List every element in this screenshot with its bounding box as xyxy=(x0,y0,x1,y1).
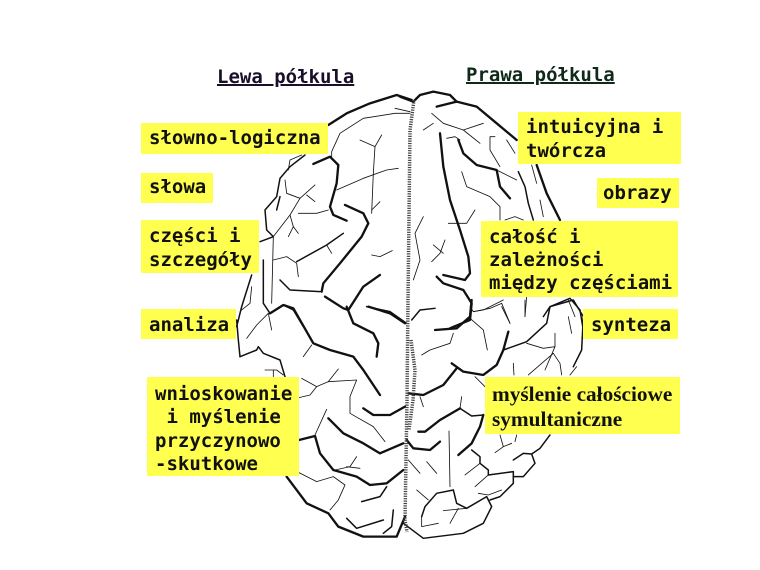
label: synteza xyxy=(583,309,678,339)
label: analiza xyxy=(141,309,236,339)
label: myślenie całościowe: myślenie całościowe symultaniczne xyxy=(492,382,672,431)
label: analiza: analiza xyxy=(149,314,229,336)
label: słowa xyxy=(141,173,213,203)
label: intuicyjna i twórcza: intuicyjna i twórcza xyxy=(526,116,663,162)
heading: right hemisphere: Prawa półkula xyxy=(466,64,615,86)
label: obrazy: obrazy xyxy=(603,182,672,204)
label: wnioskowanie: wnioskowanie i myślenie przyczynowo -skutkowe xyxy=(155,383,292,475)
left hemisphere lower xyxy=(237,305,405,537)
label: słowno-logiczna: słowno-logiczna xyxy=(149,127,321,149)
label: słowno-logiczna xyxy=(141,123,328,154)
label: całość i zależności: całość i zależności między częściami xyxy=(489,226,672,294)
label: synteza: synteza xyxy=(591,314,671,336)
midline fissure xyxy=(405,100,415,532)
right hemisphere lower xyxy=(403,300,583,538)
label: części i szczegóły: części i szczegóły xyxy=(149,225,252,271)
left hemisphere upper xyxy=(237,95,412,327)
right hemisphere upper xyxy=(400,92,583,330)
heading: left hemisphere: Lewa półkula xyxy=(217,66,354,88)
label: obrazy xyxy=(597,178,679,208)
label: słowa: słowa xyxy=(149,176,206,198)
